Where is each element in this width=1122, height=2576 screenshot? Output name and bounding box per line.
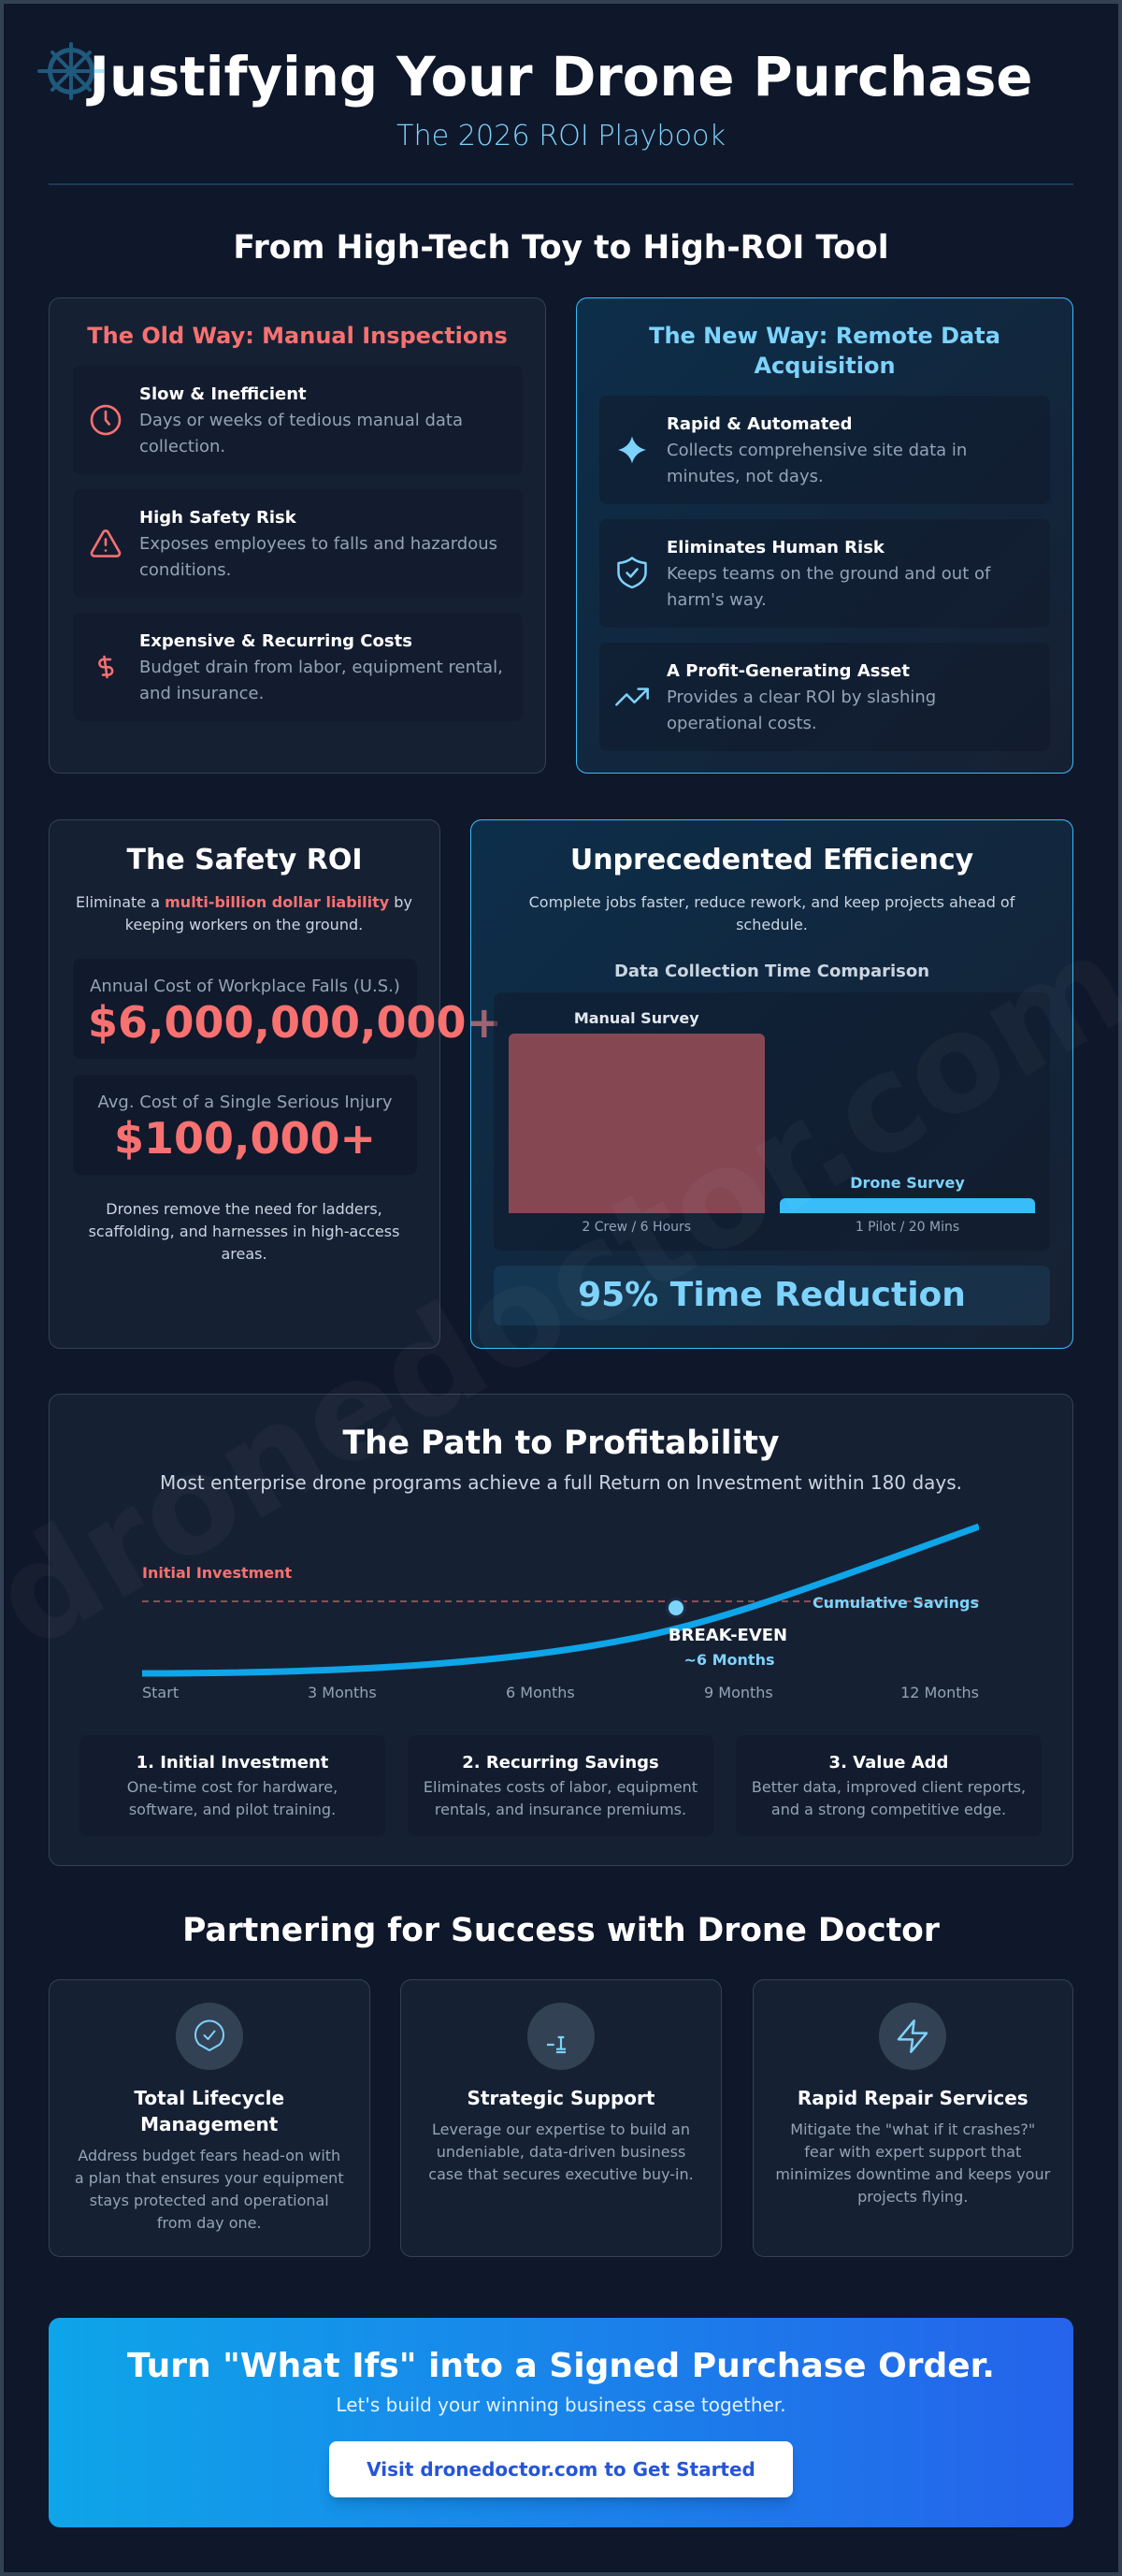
card: value add: and a strong competitive edge. xyxy=(771,1800,1006,1818)
item: expensive costs: and insurance. xyxy=(139,683,264,703)
title: Justifying Your Drone Purchase xyxy=(90,45,1032,109)
text: safety intro: keeping workers on the ground. xyxy=(125,915,363,933)
bar: drone xyxy=(780,1198,1035,1213)
button: visit site: Visit dronedoctor.com to Get Started xyxy=(367,2458,755,2481)
item: eliminates human risk: harm's way. xyxy=(667,589,767,610)
card: strategic support xyxy=(400,1979,722,2257)
label: break-even: BREAK-EVEN xyxy=(669,1626,787,1645)
heading: efficiency: Unprecedented Efficiency xyxy=(570,844,973,876)
callout: time reduction: 95% Time Reduction xyxy=(578,1276,966,1313)
panel: the new way xyxy=(576,297,1073,774)
text: profitability intro: Most enterprise drone programs achieve a full Return on Investment within 180 days. xyxy=(160,1471,962,1494)
text: safety closing: scaffolding, and harnesses in high-access xyxy=(89,1222,399,1240)
bar label: drone: Drone Survey xyxy=(850,1173,965,1192)
line chart: cumulative savings xyxy=(142,1523,979,1676)
card: recurring savings: 2. Recurring Savings xyxy=(462,1753,659,1773)
axis labels: Start xyxy=(142,1684,179,1700)
heading: new way: Acquisition xyxy=(754,353,896,379)
item: slow and inefficient: Slow & Inefficient xyxy=(139,384,307,404)
text: safety closing xyxy=(89,1199,399,1263)
card: rapid repair services: fear with expert support that xyxy=(804,2142,1021,2161)
card: recurring savings: rentals, and insurance premiums. xyxy=(435,1800,686,1818)
card: rapid repair services xyxy=(752,1979,1073,2257)
item: high safety risk: Exposes employees to falls and hazardous xyxy=(139,533,497,554)
card: total lifecycle management: Total Lifecycle xyxy=(134,2086,284,2108)
card: strategic support: Leverage our expertise to build an xyxy=(432,2120,690,2138)
item: high safety risk xyxy=(73,489,523,598)
caption: drone: 1 Pilot / 20 Mins xyxy=(856,1220,959,1235)
card: initial investment: One-time cost for hardware, xyxy=(127,1777,338,1796)
item: profit-generating asset: A Profit-Generating Asset xyxy=(667,660,910,681)
subtitle: The 2026 ROI Playbook xyxy=(396,120,726,152)
icon: support glyph xyxy=(527,2003,595,2070)
text: safety closing: areas. xyxy=(221,1244,267,1263)
item: eliminates human risk: Eliminates Human Risk xyxy=(667,537,885,557)
card: initial investment xyxy=(79,1735,385,1836)
item: expensive costs: Budget drain from labor, equipment rental, xyxy=(139,657,503,677)
card: strategic support: Strategic Support xyxy=(468,2086,654,2108)
text: efficiency intro: Complete jobs faster, reduce rework, and keep projects ahead of xyxy=(529,892,1014,911)
item: slow and inefficient xyxy=(73,366,523,474)
button: visit site xyxy=(329,2441,793,2497)
icon: lightning bolt xyxy=(879,2003,946,2070)
panel: path to profitability xyxy=(49,1394,1073,1866)
item: high safety risk: High Safety Risk xyxy=(139,507,296,528)
bar chart: time comparison xyxy=(494,992,1050,1250)
card: value add: 3. Value Add xyxy=(829,1753,948,1773)
item: rapid and automated: Rapid & Automated xyxy=(667,413,853,434)
panel: the old way xyxy=(49,297,546,774)
card: recurring savings xyxy=(408,1735,713,1836)
card: rapid repair services: Rapid Repair Services xyxy=(798,2086,1028,2108)
item: eliminates human risk xyxy=(599,519,1050,628)
card: total lifecycle management xyxy=(49,1979,370,2257)
text: safety intro xyxy=(76,892,412,933)
heading: call to action: Turn "What Ifs" into a Signed Purchase Order. xyxy=(127,2346,995,2385)
label: initial investment: Initial Investment xyxy=(142,1564,292,1581)
icon: ship wheel xyxy=(37,42,105,100)
card: value add xyxy=(736,1735,1042,1836)
axis labels xyxy=(142,1684,979,1700)
stat: annual cost of falls xyxy=(73,959,417,1059)
card: rapid repair services: Mitigate the "what if it crashes?" xyxy=(790,2120,1035,2138)
item: expensive costs xyxy=(73,613,523,721)
bar label: manual: Manual Survey xyxy=(574,1008,699,1027)
chart title: Data Collection Time Comparison xyxy=(614,962,929,981)
item: rapid and automated: Collects comprehensive site data in xyxy=(667,440,967,460)
text: efficiency intro: schedule. xyxy=(736,915,808,933)
heading: safety ROI: The Safety ROI xyxy=(127,844,362,876)
card: total lifecycle management: Address budget fears head-on with xyxy=(78,2146,340,2164)
card: total lifecycle management: a plan that ensures your equipment xyxy=(75,2168,344,2187)
card: rapid repair services: minimizes downtime and keeps your xyxy=(775,2164,1050,2183)
heading: old way: The Old Way: Manual Inspections xyxy=(87,323,508,349)
card: initial investment: 1. Initial Investment xyxy=(137,1753,328,1773)
item: profit-generating asset: Provides a clear ROI by slashing xyxy=(667,687,936,707)
item: expensive costs: Expensive & Recurring Costs xyxy=(139,630,412,651)
text: call to action: Let's build your winning business case together. xyxy=(336,2394,786,2416)
item: profit-generating asset: operational costs. xyxy=(667,713,817,733)
card: rapid repair services: projects flying. xyxy=(857,2187,968,2206)
text: safety closing: Drones remove the need for ladders, xyxy=(106,1199,382,1218)
card: strategic support: case that secures executive buy-in. xyxy=(428,2164,694,2183)
icon: shield pin xyxy=(176,2003,243,2070)
section heading: partnering: Partnering for Success with Drone Doctor xyxy=(182,1912,940,1949)
panel: safety ROI xyxy=(49,819,440,1349)
label: cumulative savings: Cumulative Savings xyxy=(813,1594,979,1611)
card: strategic support: undeniable, data-driven business xyxy=(437,2142,685,2161)
callout: time reduction xyxy=(494,1266,1050,1325)
item: rapid and automated: minutes, not days. xyxy=(667,466,824,486)
item: rapid and automated xyxy=(599,396,1050,504)
card: total lifecycle management: from day one. xyxy=(157,2213,262,2232)
stat: cost of a serious injury xyxy=(73,1075,417,1175)
heading: new way xyxy=(649,323,1000,379)
label: six months: ~6 Months xyxy=(684,1650,774,1669)
bar: manual xyxy=(509,1034,765,1213)
item: eliminates human risk: Keeps teams on the ground and out of xyxy=(667,563,990,584)
stat: cost of a serious injury: Avg. Cost of a Single Serious Injury xyxy=(97,1093,393,1112)
item: high safety risk: conditions. xyxy=(139,559,231,580)
heading: new way: The New Way: Remote Data xyxy=(649,323,1000,349)
text: efficiency intro xyxy=(529,892,1015,933)
caption: manual: 2 Crew / 6 Hours xyxy=(582,1220,691,1235)
item: slow and inefficient: collection. xyxy=(139,436,225,456)
stat: cost of a serious injury: $100,000+ xyxy=(114,1113,376,1164)
card: total lifecycle management: stays protected and operational xyxy=(90,2191,329,2209)
heading: path to profitability: The Path to Profitability xyxy=(343,1424,779,1461)
item: profit-generating asset xyxy=(599,643,1050,751)
text: safety intro: Eliminate a multi-billion dollar liability by xyxy=(76,892,412,911)
card: value add: Better data, improved client reports, xyxy=(752,1777,1026,1796)
axis labels: 6 Months xyxy=(506,1684,575,1700)
axis labels: 9 Months xyxy=(704,1684,773,1700)
card: initial investment: software, and pilot training. xyxy=(129,1800,336,1818)
call to action banner xyxy=(49,2318,1073,2527)
stat: annual cost of falls: Annual Cost of Workplace Falls (U.S.) xyxy=(90,977,400,996)
card: total lifecycle management: Management xyxy=(140,2112,278,2135)
stat: annual cost of falls: $6,000,000,000+ xyxy=(88,997,502,1048)
card: recurring savings: Eliminates costs of labor, equipment xyxy=(424,1777,698,1796)
panel: efficiency xyxy=(470,819,1073,1349)
axis labels: 3 Months xyxy=(308,1684,377,1700)
axis labels: 12 Months xyxy=(900,1684,979,1700)
section heading: from toy to tool: From High-Tech Toy to High-ROI Tool xyxy=(233,229,889,267)
item: slow and inefficient: Days or weeks of tedious manual data xyxy=(139,410,463,430)
